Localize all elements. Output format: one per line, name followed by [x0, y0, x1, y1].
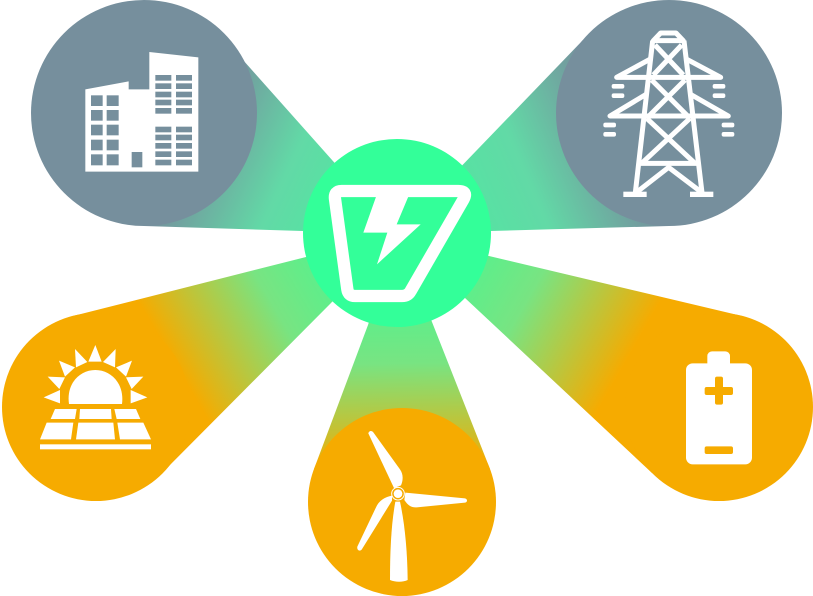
icon: solar panel and sun — [40, 345, 151, 449]
beam: battery to hub — [397, 233, 742, 473]
panel: solar circle — [2, 313, 190, 501]
icon: lightning logo — [335, 191, 465, 296]
icon: wind turbine — [357, 431, 467, 582]
beam: pylon to hub — [397, 40, 669, 233]
beam: solar to hub — [73, 233, 397, 473]
icon: battery — [686, 351, 752, 464]
panel: building circle — [31, 0, 257, 226]
panel: wind circle — [308, 408, 496, 596]
panel: central hub circle — [303, 139, 491, 327]
beam: building to hub — [144, 60, 397, 233]
icon: office buildings — [85, 52, 198, 172]
panel: pylon circle — [556, 0, 782, 226]
beam: wind to hub — [314, 233, 490, 469]
icon: electricity pylon — [603, 33, 734, 197]
panel: battery circle — [625, 313, 813, 501]
